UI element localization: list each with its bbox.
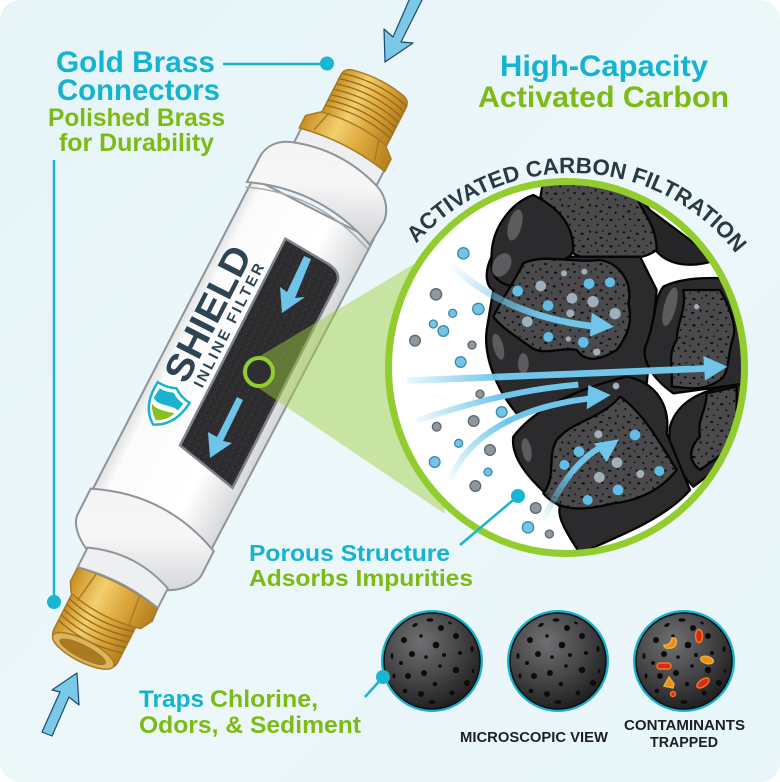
heading: gold brass connectors: for Durability xyxy=(59,129,214,157)
carbon porous lower right xyxy=(691,387,737,470)
text: traps chlorine, odors and sediment: Odors, & Sediment xyxy=(139,712,361,739)
carbon porous lower xyxy=(543,397,677,508)
carbon sphere 1 xyxy=(381,610,483,712)
text: porous structure adsorbs impurities: Adsorbs Impurities xyxy=(249,565,473,591)
carbon sphere 3: contaminants trapped xyxy=(633,610,735,712)
arrow in window upper xyxy=(280,256,311,313)
magnified circle: activated carbon xyxy=(388,180,750,554)
heading: gold brass connectors: Polished Brass xyxy=(48,104,225,132)
label: microscopic view: MICROSCOPIC VIEW xyxy=(460,730,608,746)
top brass connector xyxy=(299,58,421,171)
particles inside rocks xyxy=(512,269,699,505)
highlights on rocks xyxy=(488,208,681,463)
arrow in window lower xyxy=(208,397,243,458)
text: traps chlorine, odors and sediment xyxy=(139,686,361,739)
particles outside rocks xyxy=(410,248,553,538)
callout line: gold brass connectors xyxy=(223,56,334,70)
top neck xyxy=(291,119,389,191)
text: porous structure adsorbs impurities xyxy=(249,540,473,591)
magnifier ring on filter xyxy=(245,358,273,386)
label: contaminants trapped: CONTAMINANTS xyxy=(624,718,745,734)
icon: shield logo xyxy=(137,378,192,435)
main white body xyxy=(90,178,374,557)
heading: gold brass connectors: Gold Brass xyxy=(56,46,215,79)
carbon window xyxy=(174,239,344,488)
top cap xyxy=(247,125,401,246)
bottom cap xyxy=(65,475,221,601)
text: traps chlorine, odors and sediment: Chlorine, xyxy=(210,686,318,713)
arrow: water flow in bottom xyxy=(42,673,79,736)
top cap groove xyxy=(246,174,374,249)
flow arrows xyxy=(407,263,727,521)
heading: gold brass connectors: Connectors xyxy=(57,74,220,107)
heading: high-capacity activated carbon: Activated Carbon xyxy=(478,81,729,114)
text: traps chlorine, odors and sediment: Traps xyxy=(139,686,204,713)
arc title: activated carbon filtration: ACTIVATED CARBON FILTRATION xyxy=(406,158,747,282)
carbon porous top xyxy=(540,180,657,260)
arrow: water flow in top xyxy=(384,0,423,62)
magnification cone xyxy=(257,258,445,514)
carbon rock lower centre xyxy=(513,377,690,553)
label: contaminants trapped xyxy=(624,718,745,751)
callout line: traps chlorine xyxy=(365,670,390,697)
carbon lump top left xyxy=(491,195,573,287)
callout line: porous structure xyxy=(460,489,525,545)
heading: gold brass connectors xyxy=(48,46,225,157)
brand text: shield: SHIELD xyxy=(157,239,261,389)
filter cartridge xyxy=(19,48,440,694)
carbon porous centre xyxy=(493,259,630,359)
bottom brass connector xyxy=(40,563,161,682)
heading: high-capacity activated carbon: High-Capacity xyxy=(500,50,709,83)
carbon porous right xyxy=(671,290,734,388)
carbon rock right xyxy=(645,278,747,393)
carbon rock top right xyxy=(640,202,710,266)
bottom neck xyxy=(78,540,172,608)
carbon rock lower right xyxy=(669,383,750,487)
carbon rock dark left xyxy=(486,257,657,413)
callout line: left vertical to lower connector xyxy=(47,160,61,609)
carbon sphere 2: microscopic view xyxy=(507,610,609,712)
heading: high-capacity activated carbon xyxy=(478,50,729,114)
label: contaminants trapped: TRAPPED xyxy=(650,735,718,751)
brand text: inline filter: INLINE FILTER xyxy=(191,261,268,391)
text: porous structure adsorbs impurities: Porous Structure xyxy=(249,540,450,566)
